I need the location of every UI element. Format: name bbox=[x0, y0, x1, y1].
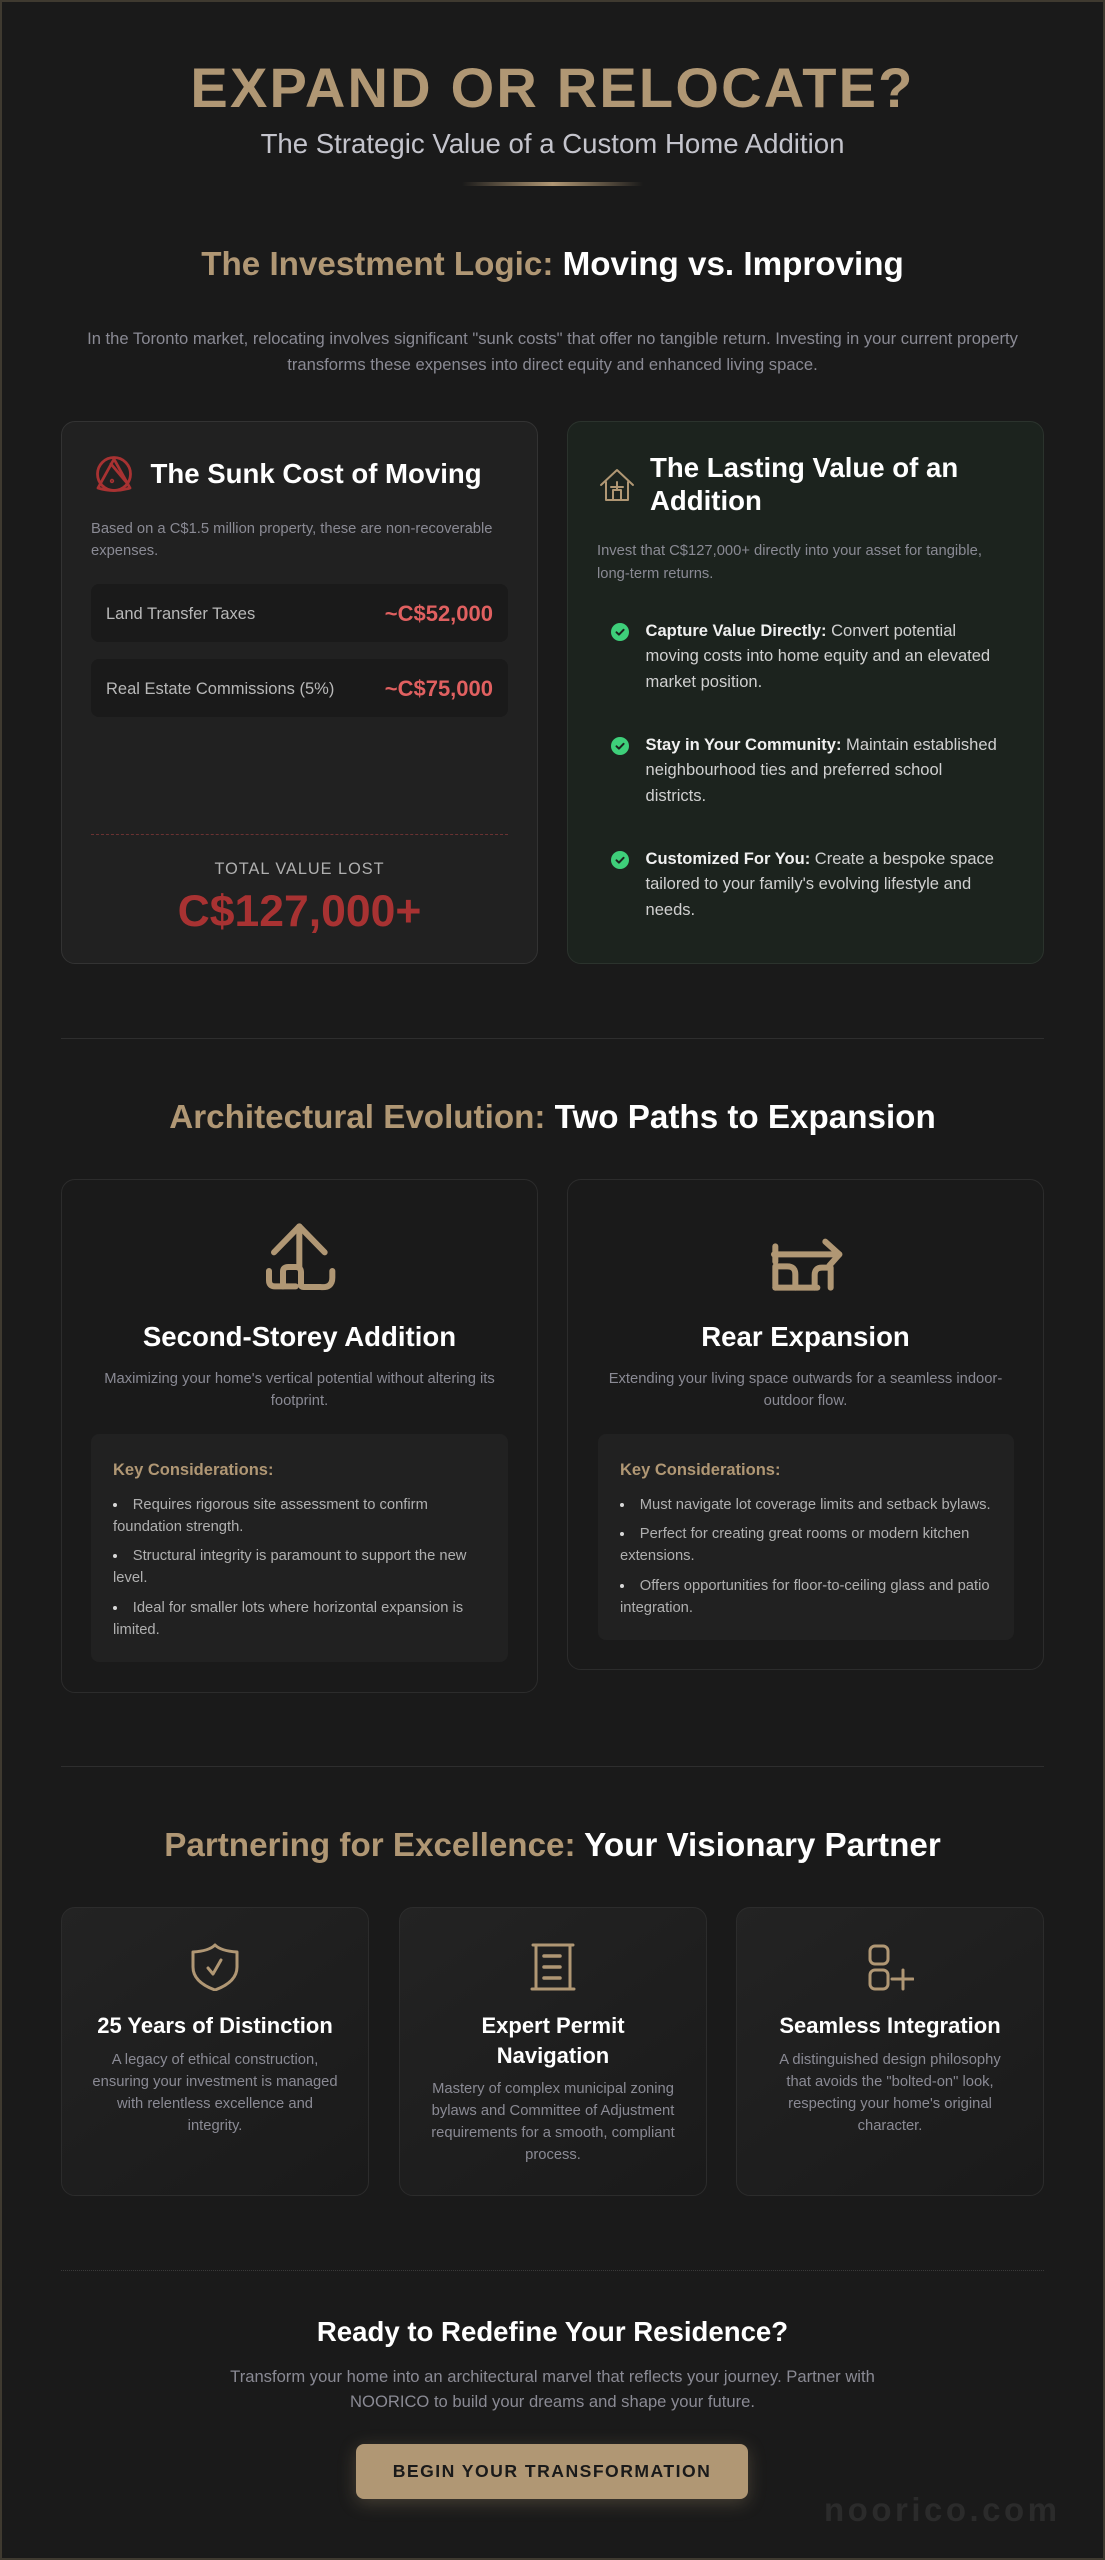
considerations list: Offers opportunities for floor-to-ceiling glass and patio bbox=[640, 1578, 990, 1594]
benefit 3: needs. bbox=[646, 900, 695, 919]
panel: seamless integration bbox=[736, 1907, 1044, 2196]
considerations list bbox=[113, 1496, 466, 1638]
panel title bbox=[650, 452, 958, 516]
card title: Expert Permit bbox=[481, 2013, 625, 2038]
benefit 2 bbox=[646, 734, 997, 805]
panel: 25 years of distinction bbox=[61, 1907, 369, 2196]
card description bbox=[779, 2052, 1001, 2134]
considerations list: integration. bbox=[620, 1600, 693, 1616]
icon: integration blocks bbox=[868, 1944, 914, 1990]
card title: Second-Storey Addition bbox=[143, 1321, 456, 1352]
intro text: transforms these expenses into direct equity and enhanced living space. bbox=[287, 355, 818, 374]
heading: architectural evolution: Architectural Evolution: Two Paths to Expansion bbox=[169, 1098, 936, 1136]
benefit 2: districts. bbox=[646, 786, 706, 805]
considerations list: Structural integrity is paramount to support the new bbox=[133, 1548, 466, 1564]
title: EXPAND OR RELOCATE? bbox=[190, 56, 915, 119]
considerations list: foundation strength. bbox=[113, 1518, 243, 1534]
card description: bylaws and Committee of Adjustment bbox=[432, 2103, 674, 2119]
card description: character. bbox=[858, 2118, 922, 2134]
card title: 25 Years of Distinction bbox=[97, 2013, 333, 2038]
icon: outward arrow from house bbox=[771, 1238, 842, 1291]
cost row: land transfer taxes: ~C$52,000 bbox=[385, 601, 493, 626]
considerations list bbox=[620, 1496, 991, 1616]
card description: ensuring your investment is managed bbox=[92, 2074, 338, 2090]
panel title: The Lasting Value of an bbox=[650, 452, 958, 483]
cost row: real estate commissions bbox=[91, 659, 508, 717]
card description: A distinguished design philosophy bbox=[779, 2052, 1001, 2068]
panel: expert permit navigation bbox=[399, 1907, 707, 2196]
benefit 3: tailored to your family's evolving lifestyle and bbox=[646, 874, 971, 893]
benefit 3: Customized For You: Create a bespoke space bbox=[646, 848, 994, 868]
card description: Mastery of complex municipal zoning bbox=[432, 2081, 674, 2097]
heading: partnering for excellence: Partnering for Excellence: Your Visionary Partner bbox=[164, 1826, 941, 1864]
intro text bbox=[87, 329, 1018, 374]
panel: rear expansion bbox=[567, 1179, 1044, 1670]
header bbox=[190, 56, 915, 186]
card description: process. bbox=[525, 2147, 581, 2163]
call to action bbox=[230, 2316, 875, 2510]
considerations list: Ideal for smaller lots where horizontal expansion is bbox=[133, 1600, 463, 1616]
benefit 3 bbox=[646, 848, 994, 919]
card description: requirements for a smooth, compliant bbox=[431, 2125, 675, 2141]
cta button: BEGIN YOUR TRANSFORMATION bbox=[393, 2461, 711, 2481]
cost row: real estate commissions: ~C$75,000 bbox=[385, 676, 493, 701]
panel description bbox=[597, 543, 982, 582]
card description: Extending your living space outwards for a seamless indoor- bbox=[609, 1371, 1002, 1387]
key considerations box bbox=[91, 1434, 508, 1662]
panel description: long-term returns. bbox=[597, 566, 713, 582]
benefit 1: moving costs into home equity and an elevated bbox=[646, 646, 990, 665]
card title: Navigation bbox=[497, 2043, 609, 2068]
icon: permit document bbox=[530, 1944, 576, 1990]
cost row: real estate commissions: Real Estate Commissions (5%) bbox=[106, 680, 334, 698]
card title: Rear Expansion bbox=[701, 1321, 910, 1352]
panel title: Addition bbox=[650, 485, 762, 516]
card description: outdoor flow. bbox=[764, 1393, 847, 1409]
considerations list: limited. bbox=[113, 1622, 160, 1638]
benefit 1: Capture Value Directly: Convert potential bbox=[646, 620, 956, 640]
benefit 1: market position. bbox=[646, 672, 762, 691]
considerations list: level. bbox=[113, 1570, 147, 1586]
icon: upward arrow over house bbox=[266, 1223, 336, 1290]
card description bbox=[609, 1371, 1002, 1409]
card description: footprint. bbox=[271, 1393, 328, 1409]
card description bbox=[104, 1371, 495, 1409]
panel: second-storey addition bbox=[61, 1179, 538, 1693]
total label: TOTAL VALUE LOST bbox=[214, 860, 385, 878]
intro text: In the Toronto market, relocating involves significant "sunk costs" that offer no tangible return. Investing in your current property bbox=[87, 329, 1018, 348]
dashed total divider bbox=[91, 834, 508, 835]
card description bbox=[431, 2081, 675, 2163]
box heading: Key Considerations: bbox=[113, 1461, 273, 1479]
box heading: Key Considerations: bbox=[620, 1461, 780, 1479]
subtitle: The Strategic Value of a Custom Home Addition bbox=[261, 128, 844, 159]
card description: A legacy of ethical construction, bbox=[112, 2052, 318, 2068]
icon: check 3 bbox=[611, 851, 629, 869]
card description: integrity. bbox=[188, 2118, 242, 2134]
panel description: expenses. bbox=[91, 543, 158, 559]
icon: check 1 bbox=[611, 623, 629, 641]
cta text: NOORICO to build your dreams and shape your future. bbox=[350, 2392, 755, 2411]
panel title: The Sunk Cost of Moving bbox=[150, 458, 482, 489]
cta heading: Ready to Redefine Your Residence? bbox=[317, 2316, 788, 2347]
considerations list: Requires rigorous site assessment to confirm bbox=[133, 1496, 428, 1512]
card description: respecting your home's original bbox=[788, 2096, 992, 2112]
cta text: Transform your home into an architectural marvel that reflects your journey. Partner with bbox=[230, 2366, 875, 2386]
cost row: land transfer taxes bbox=[91, 584, 508, 642]
header accent line bbox=[462, 182, 643, 186]
watermark: noorico.com bbox=[824, 2491, 1061, 2528]
benefit 2: Stay in Your Community: Maintain established bbox=[646, 734, 997, 754]
considerations list: extensions. bbox=[620, 1548, 695, 1564]
panel description: Based on a C$1.5 million property, these are non-recoverable bbox=[91, 520, 492, 536]
card title: Seamless Integration bbox=[779, 2013, 1001, 2038]
card description: that avoids the "bolted-on" look, bbox=[786, 2074, 994, 2090]
card description: with relentless excellence and bbox=[117, 2096, 313, 2112]
card description bbox=[92, 2052, 338, 2134]
icon: sunk cost warning bbox=[96, 456, 132, 492]
icon: shield check bbox=[192, 1943, 238, 1991]
considerations list: Perfect for creating great rooms or modern kitchen bbox=[640, 1526, 969, 1542]
considerations list: Must navigate lot coverage limits and setback bylaws. bbox=[640, 1496, 991, 1512]
panel: lasting value of an addition bbox=[567, 421, 1044, 964]
benefit 1 bbox=[646, 620, 990, 691]
icon: check 2 bbox=[611, 737, 629, 755]
cost row: land transfer taxes: Land Transfer Taxes bbox=[106, 604, 255, 622]
card description: Maximizing your home's vertical potential without altering its bbox=[104, 1371, 495, 1387]
heading: investment logic: The Investment Logic: Moving vs. Improving bbox=[201, 246, 904, 282]
card title bbox=[481, 2013, 625, 2068]
key considerations box bbox=[598, 1434, 1014, 1640]
icon: house bbox=[600, 469, 634, 501]
cta button bbox=[356, 2444, 748, 2499]
cta text bbox=[230, 2366, 875, 2411]
panel: sunk cost of moving bbox=[61, 421, 538, 964]
benefit 2: neighbourhood ties and preferred school bbox=[646, 760, 942, 779]
panel description: Invest that C$127,000+ directly into your asset for tangible, bbox=[597, 543, 982, 559]
panel description bbox=[91, 520, 492, 559]
total value: C$127,000+ bbox=[178, 887, 421, 936]
